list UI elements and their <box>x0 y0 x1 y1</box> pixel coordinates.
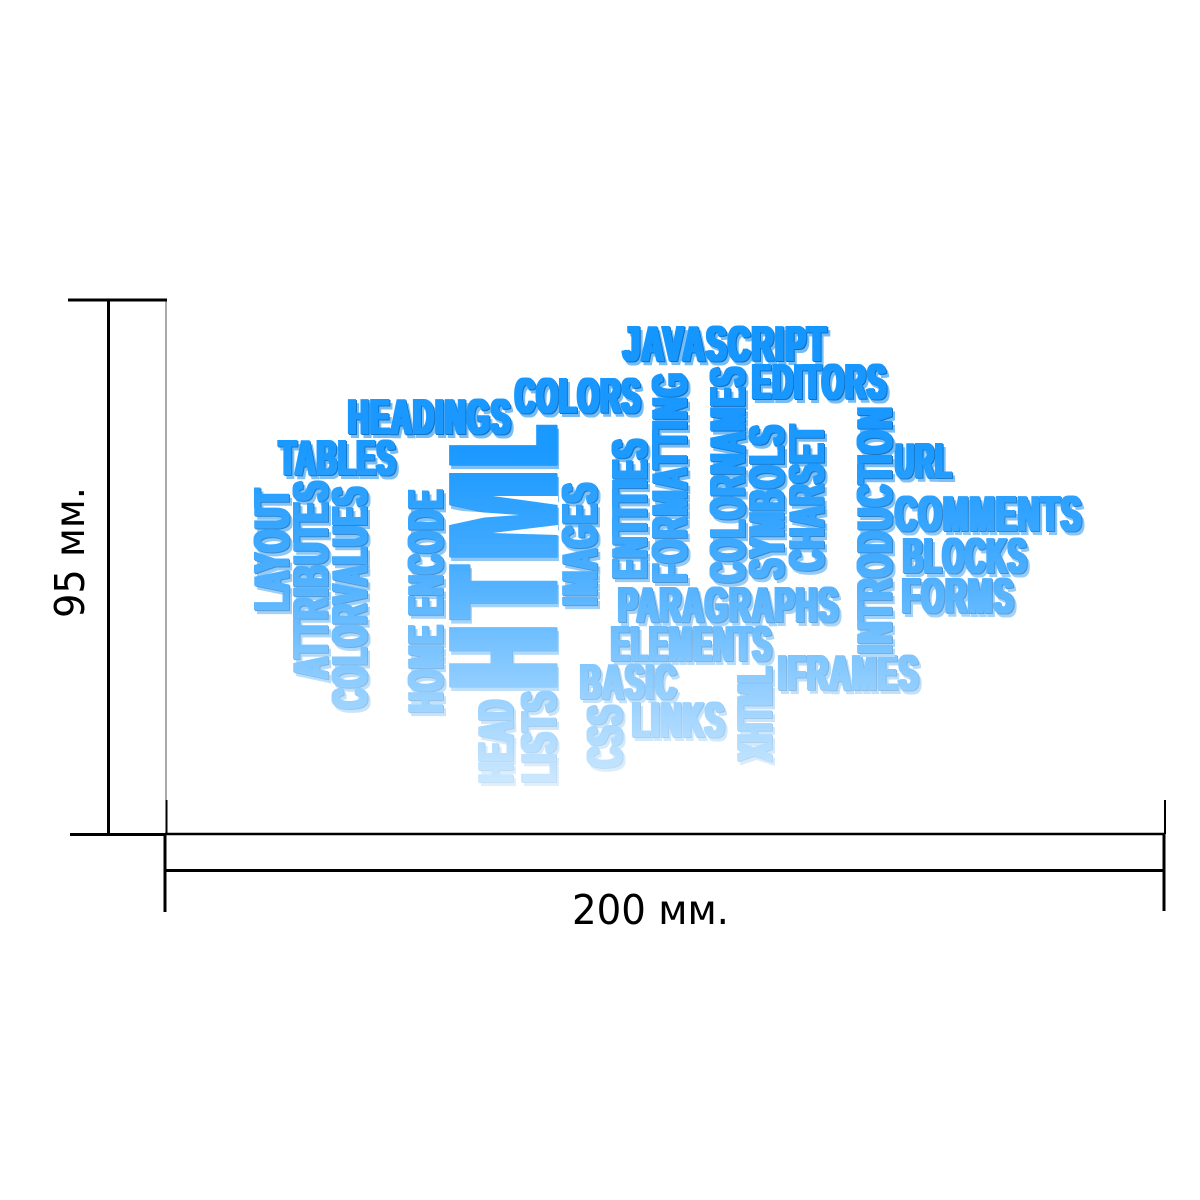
word: URL: URL <box>895 434 952 488</box>
word: HTML: M <box>418 472 587 558</box>
dimension lines: width 200 mm <box>165 800 1165 912</box>
vertical words <box>246 366 902 782</box>
word: PARAGRAPHS: PARAGRAPHS <box>618 578 840 632</box>
label: 200 mm: 200 мм. <box>572 886 729 934</box>
word: INTRODUCTION: INTRODUCTION <box>848 406 902 653</box>
word: FORMS: FORMS <box>902 570 1014 624</box>
word: TABLES: TABLES <box>279 432 396 486</box>
word: LAYOUT: LAYOUT <box>246 488 300 610</box>
word: HTML: T <box>418 570 587 614</box>
word: COMMENTS: COMMENTS <box>895 488 1082 542</box>
word: HOME ENCODE: HOME ENCODE <box>400 488 454 712</box>
word: ELEMENTS: ELEMENTS <box>611 618 772 672</box>
word: LINKS: LINKS <box>632 694 726 748</box>
word: HEAD: HEAD <box>470 698 524 782</box>
word: XHTML: XHTML <box>728 665 782 760</box>
word: COLORNAMES: COLORNAMES <box>702 366 756 582</box>
word: HEADINGS: HEADINGS <box>348 390 512 444</box>
dimension lines: height 95 mm <box>68 300 167 834</box>
horizontal words <box>279 318 1082 748</box>
word: ENTITIES: ENTITIES <box>604 438 658 578</box>
word: EDITORS: EDITORS <box>752 356 888 410</box>
word: COLORS: COLORS <box>515 370 642 424</box>
label: 95 mm: 95 мм. <box>46 487 94 618</box>
word: BLOCKS: BLOCKS <box>903 530 1028 584</box>
word: IFRAMES: IFRAMES <box>778 646 920 700</box>
word: JAVASCRIPT: JAVASCRIPT <box>623 318 828 372</box>
word: IMAGES: IMAGES <box>554 481 608 605</box>
word: HTML: H <box>418 628 587 686</box>
word: COLORVALUES: COLORVALUES <box>324 486 378 708</box>
image frame: left edge hairline <box>165 300 167 800</box>
word cloud <box>246 318 1082 782</box>
word: CSS: CSS <box>578 704 632 767</box>
word: CHARSET: CHARSET <box>780 424 834 570</box>
word: FORMATTING: FORMATTING <box>644 372 698 582</box>
M letter notches <box>449 496 558 535</box>
word: BASIC: BASIC <box>580 656 678 710</box>
word: ATTRIBUTES: ATTRIBUTES <box>284 480 338 678</box>
large vertical word <box>449 424 559 691</box>
word cloud: L <box>418 429 587 463</box>
word: LISTS: LISTS <box>512 690 566 782</box>
word: SYMBOLS: SYMBOLS <box>740 424 794 578</box>
